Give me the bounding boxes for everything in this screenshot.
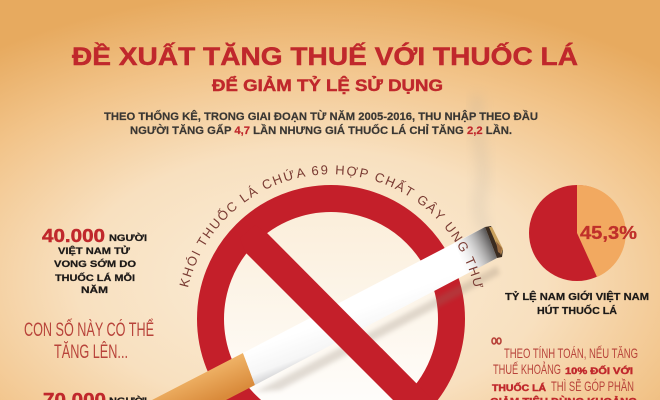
pie caption: TỶ LỆ NAM GIỚI VIỆT NAM (505, 290, 649, 303)
smoke (476, 95, 486, 232)
stat: 40.000: THUỐC LÁ MỖI (55, 272, 135, 284)
subtitle: ĐỂ GIẢM TỶ LỆ SỬ DỤNG (212, 76, 443, 95)
stat: 70.000 (44, 392, 146, 400)
ember (485, 226, 503, 258)
text: may increase (24, 319, 154, 363)
title (72, 41, 578, 95)
stat: 40.000: NGƯỜI (109, 232, 147, 244)
quote: THUỐC LÁ (492, 382, 546, 394)
pie chart (529, 185, 637, 281)
text: may increase: TĂNG LÊN... (54, 341, 128, 363)
intro text (104, 109, 538, 137)
no-smoking sign (210, 198, 452, 400)
text: may increase: CON SỐ NÀY CÓ THỂ (24, 319, 154, 341)
pie caption (505, 290, 649, 317)
stat: 40.000: NĂM (81, 285, 108, 296)
quote: THUẾ KHOẢNG (493, 361, 561, 377)
icon: quote mark (492, 338, 501, 344)
stat: 40.000: 40.000 (42, 225, 105, 246)
intro text: NGƯỜI TĂNG GẤP 4,7 LẦN NHƯNG GIÁ THUỐC LÁ CHỈ TĂNG 2,2 LẦN. (130, 123, 512, 137)
stat: 40.000: VIỆT NAM TỬ (58, 245, 130, 257)
cigarette shadow (255, 266, 500, 392)
pie base (529, 185, 625, 281)
sign interior (223, 211, 439, 400)
pie slice 45.3% (577, 185, 626, 277)
title: ĐỀ XUẤT TĂNG THUẾ VỚI THUỐC LÁ (72, 41, 578, 71)
intro text: THEO THỐNG KÊ, TRONG GIAI ĐOẠN TỪ NĂM 2005-2016, THU NHẬP THEO ĐẦU (104, 109, 538, 123)
quote: 10% ĐỐI VỚI (565, 365, 633, 377)
paper (243, 227, 497, 385)
quote (490, 338, 638, 400)
pie caption: HÚT THUỐC LÁ (537, 303, 617, 317)
filter (152, 353, 255, 400)
burnt end (457, 227, 497, 270)
stat: 40.000: VONG SỚM DO (54, 258, 136, 270)
red ring (210, 198, 452, 400)
red slash (240, 225, 433, 400)
cigarette (152, 226, 503, 400)
pie value: 45,3% (580, 223, 637, 243)
stat: 40.000 (42, 225, 147, 296)
arc caption: KHÓI THUỐC LÁ CHỨA 69 HỢP CHẤT GÂY UNG THƯ (180, 165, 484, 287)
